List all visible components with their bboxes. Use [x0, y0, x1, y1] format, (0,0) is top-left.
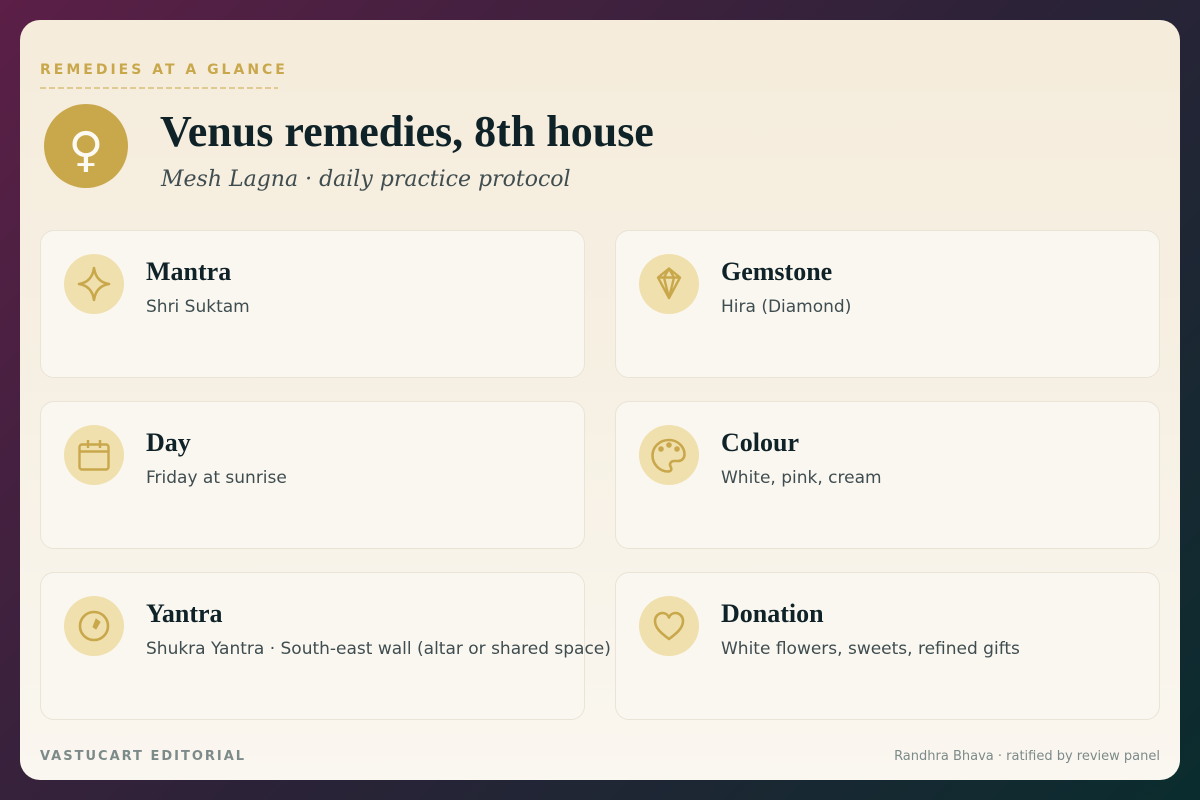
- day heading: Day: [146, 428, 191, 457]
- day value: Friday at sunrise: [146, 468, 287, 488]
- icon: venus symbol: [44, 104, 128, 188]
- icon: yantra disc: [64, 596, 124, 656]
- yantra value: Shukra Yantra · South-east wall (altar or shared space): [146, 639, 611, 659]
- footer: note: Randhra Bhava · ratified by review panel: [894, 749, 1160, 764]
- colour value: White, pink, cream: [721, 468, 882, 488]
- panel: gemstone: [615, 230, 1160, 378]
- footer: brand: VASTUCART EDITORIAL: [40, 749, 246, 764]
- eyebrow label: REMEDIES AT A GLANCE: [40, 62, 288, 78]
- icon: venus symbol: ♀: [68, 122, 104, 178]
- mantra heading: Mantra: [146, 257, 231, 286]
- donation value: White flowers, sweets, refined gifts: [721, 639, 1020, 659]
- panel: mantra: [40, 230, 585, 378]
- panel: donation: [615, 572, 1160, 720]
- gemstone value: Hira (Diamond): [721, 297, 851, 317]
- icon: diamond: [639, 254, 699, 314]
- icon: calendar: [64, 425, 124, 485]
- subtitle: Mesh Lagna · daily practice protocol: [161, 167, 571, 192]
- title: Venus remedies, 8th house: [160, 107, 654, 156]
- icon: heart: [639, 596, 699, 656]
- icon: palette: [639, 425, 699, 485]
- donation heading: Donation: [721, 599, 824, 628]
- panel: day: [40, 401, 585, 549]
- icon: four-point star: [64, 254, 124, 314]
- gemstone heading: Gemstone: [721, 257, 832, 286]
- dashed rule: [40, 87, 278, 89]
- yantra heading: Yantra: [146, 599, 223, 628]
- mantra value: Shri Suktam: [146, 297, 250, 317]
- colour heading: Colour: [721, 428, 799, 457]
- panel: yantra: [40, 572, 585, 720]
- panel: colour: [615, 401, 1160, 549]
